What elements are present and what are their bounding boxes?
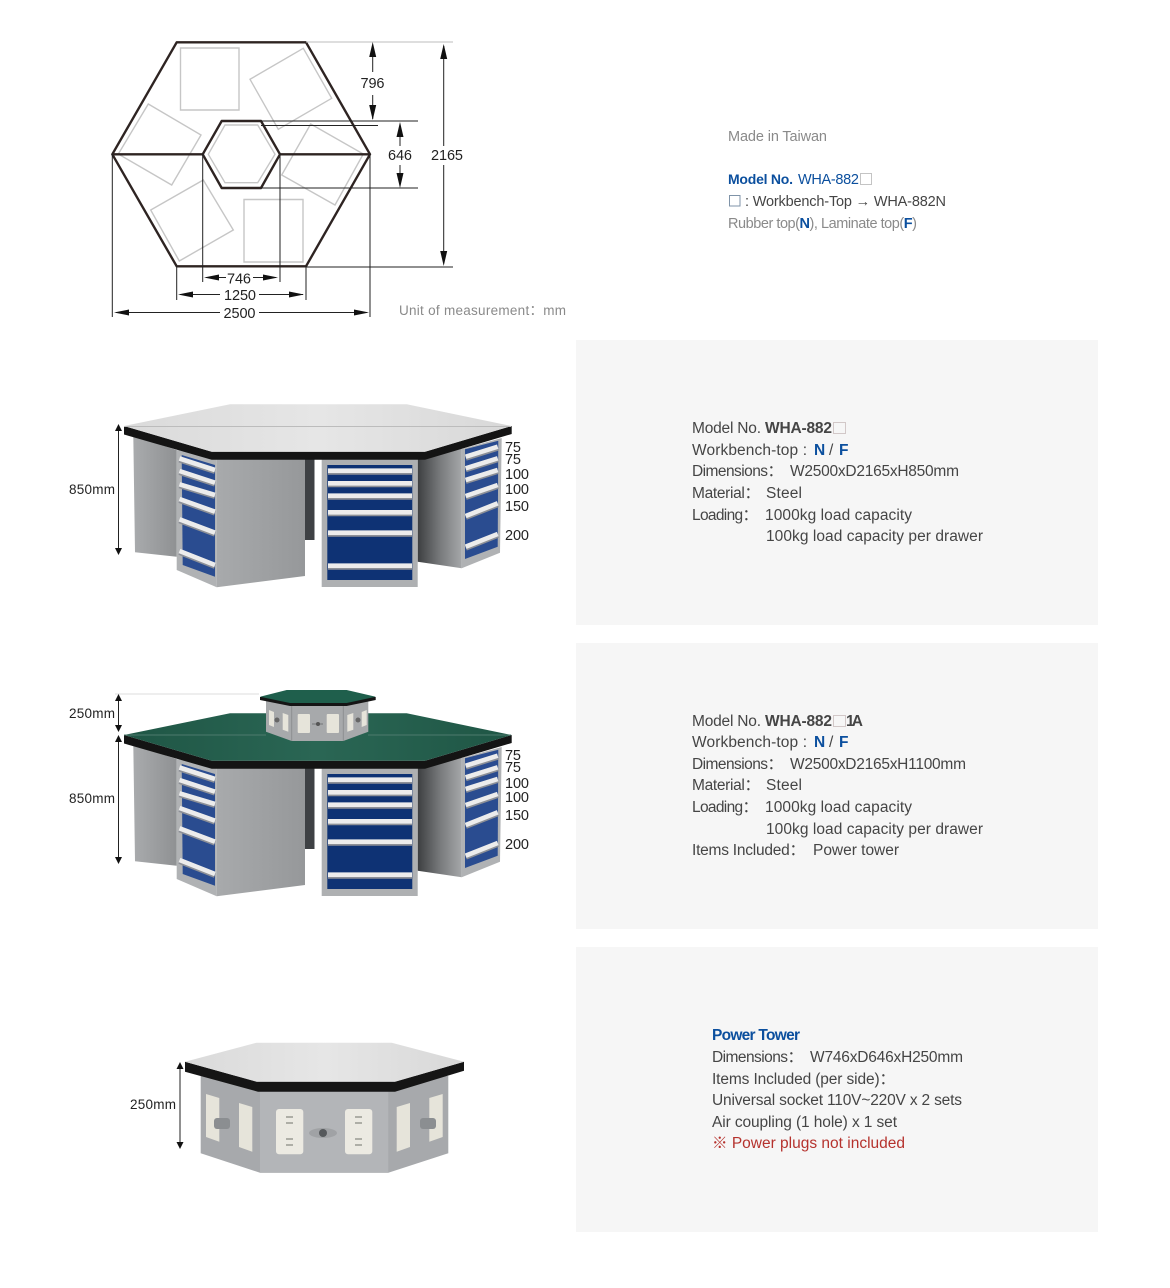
dimension: 250mm over 850mm: 250mm <box>69 706 115 721</box>
air couplings <box>214 1118 436 1138</box>
spec text: WHA-882 1A: 1A <box>846 713 863 730</box>
power tower on green workbench <box>260 690 376 741</box>
spec text: WHA-882: WHA-882 <box>765 420 832 437</box>
spec text: WHA-882 1A: F <box>839 734 848 751</box>
spec text: WHA-882: / <box>829 442 834 459</box>
spec text: power tower: ※ Power plugs not included <box>712 1135 905 1152</box>
spec text: power tower: Power Tower <box>712 1027 800 1044</box>
model information text: Made in Taiwan <box>728 129 827 145</box>
power tower product <box>185 1043 464 1173</box>
spec text: WHA-882: W2500xD2165xH850mm <box>790 463 959 480</box>
dimension: power tower 250mm <box>130 1062 184 1149</box>
workbench with green top and power tower <box>124 690 512 896</box>
spec text: WHA-882: F <box>839 442 848 459</box>
drawer height labels, second workbench: 75 <box>505 748 521 764</box>
drawer height labels: 200 <box>505 528 529 544</box>
model information text <box>728 129 946 232</box>
drawer height labels, second workbench: 150 <box>505 808 529 824</box>
spec text: WHA-882 <box>692 420 983 545</box>
model information text: Rubber top(N), Laminate top(F) <box>728 216 917 232</box>
panel: power tower background <box>576 947 1098 1232</box>
spec text: power tower: Items Included (per side)： <box>712 1071 895 1088</box>
spec text: WHA-882: Dimensions： <box>692 463 783 480</box>
spec text: WHA-882 1A: N <box>814 734 825 751</box>
dimension: 250mm over 850mm <box>69 694 259 864</box>
workbench with grey top <box>124 404 512 587</box>
dimension: power tower 250mm: 250mm <box>130 1097 176 1112</box>
sockets <box>206 1094 443 1154</box>
drawer height labels: 100 <box>505 467 529 483</box>
drawer height labels <box>505 440 529 544</box>
spec text: power tower <box>712 1027 963 1152</box>
drawer height labels, second workbench: 100 <box>505 776 529 792</box>
spec text: WHA-882 1A: Model No. <box>692 713 761 730</box>
drawer height labels, second workbench: 75 <box>505 760 521 776</box>
spec text: WHA-882 1A <box>692 713 983 859</box>
top view dimension drawing: 796 <box>360 76 384 92</box>
spec text: WHA-882: 1000kg load capacity <box>765 507 912 524</box>
spec text: WHA-882 1A: 100kg load capacity per drawer <box>766 821 983 838</box>
dimension: 250mm over 850mm: 850mm <box>69 791 115 806</box>
spec text: WHA-882: Steel <box>766 485 802 502</box>
top view dimension drawing: 2165 <box>431 148 463 164</box>
spec text: WHA-882 1A: Power tower <box>813 842 899 859</box>
spec text: power tower: Dimensions： <box>712 1049 803 1066</box>
spec text: WHA-882 1A: Loading： <box>692 799 758 816</box>
model information text: WHA-882 <box>798 172 859 188</box>
top view dimension drawing: 646 <box>388 148 412 164</box>
spec text: WHA-882 1A: Items Included： <box>692 842 805 859</box>
spec text: WHA-882 1A: Steel <box>766 777 802 794</box>
spec text: WHA-882 1A: WHA-882 <box>765 713 832 730</box>
drawer height labels, second workbench: 200 <box>505 837 529 853</box>
spec text: WHA-882 1A: 1000kg load capacity <box>765 799 912 816</box>
spec text: WHA-882: Loading： <box>692 507 758 524</box>
drawer height labels: 75 <box>505 452 521 468</box>
drawer height labels, second workbench: 100 <box>505 790 529 806</box>
spec text: WHA-882 1A: W2500xD2165xH1100mm <box>790 756 966 773</box>
panel: spec WHA-882 background <box>576 340 1098 625</box>
spec text: WHA-882 1A: Material： <box>692 777 760 794</box>
top view dimension drawing: 2500 <box>224 306 256 322</box>
drawer height labels: 150 <box>505 499 529 515</box>
top view dimension drawing: 746 <box>227 272 251 288</box>
spec text: WHA-882 1A: Dimensions： <box>692 756 783 773</box>
top view dimension drawing <box>112 42 463 322</box>
drawer height labels: 100 <box>505 482 529 498</box>
dimension: 850mm <box>69 424 122 555</box>
spec text: WHA-882: Workbench-top : <box>692 442 807 459</box>
model information text: Model No. <box>728 171 793 187</box>
spec text: WHA-882 1A: / <box>829 734 834 751</box>
dimension: 850mm: 850mm <box>69 482 115 497</box>
spec text: WHA-882: 100kg load capacity per drawer <box>766 528 983 545</box>
spec text: WHA-882: N <box>814 442 825 459</box>
model information text: : Workbench-Top → WHA-882N <box>745 194 946 210</box>
spec text: WHA-882: Material： <box>692 485 760 502</box>
panel: spec WHA-882 1A background <box>576 643 1098 929</box>
spec text: WHA-882 1A: Workbench-top : <box>692 734 807 751</box>
spec text: power tower: W746xD646xH250mm <box>810 1049 963 1066</box>
unit of measurement note: Unit of measurement：mm <box>399 303 566 318</box>
top view dimension drawing: 1250 <box>224 288 256 304</box>
spec text: power tower: Air coupling (1 hole) x 1 set <box>712 1114 898 1131</box>
spec text: WHA-882: Model No. <box>692 420 761 437</box>
drawer height labels: 75 <box>505 440 521 456</box>
spec text: power tower: Universal socket 110V~220V x 2 sets <box>712 1092 962 1109</box>
drawer height labels, second workbench <box>505 748 529 853</box>
